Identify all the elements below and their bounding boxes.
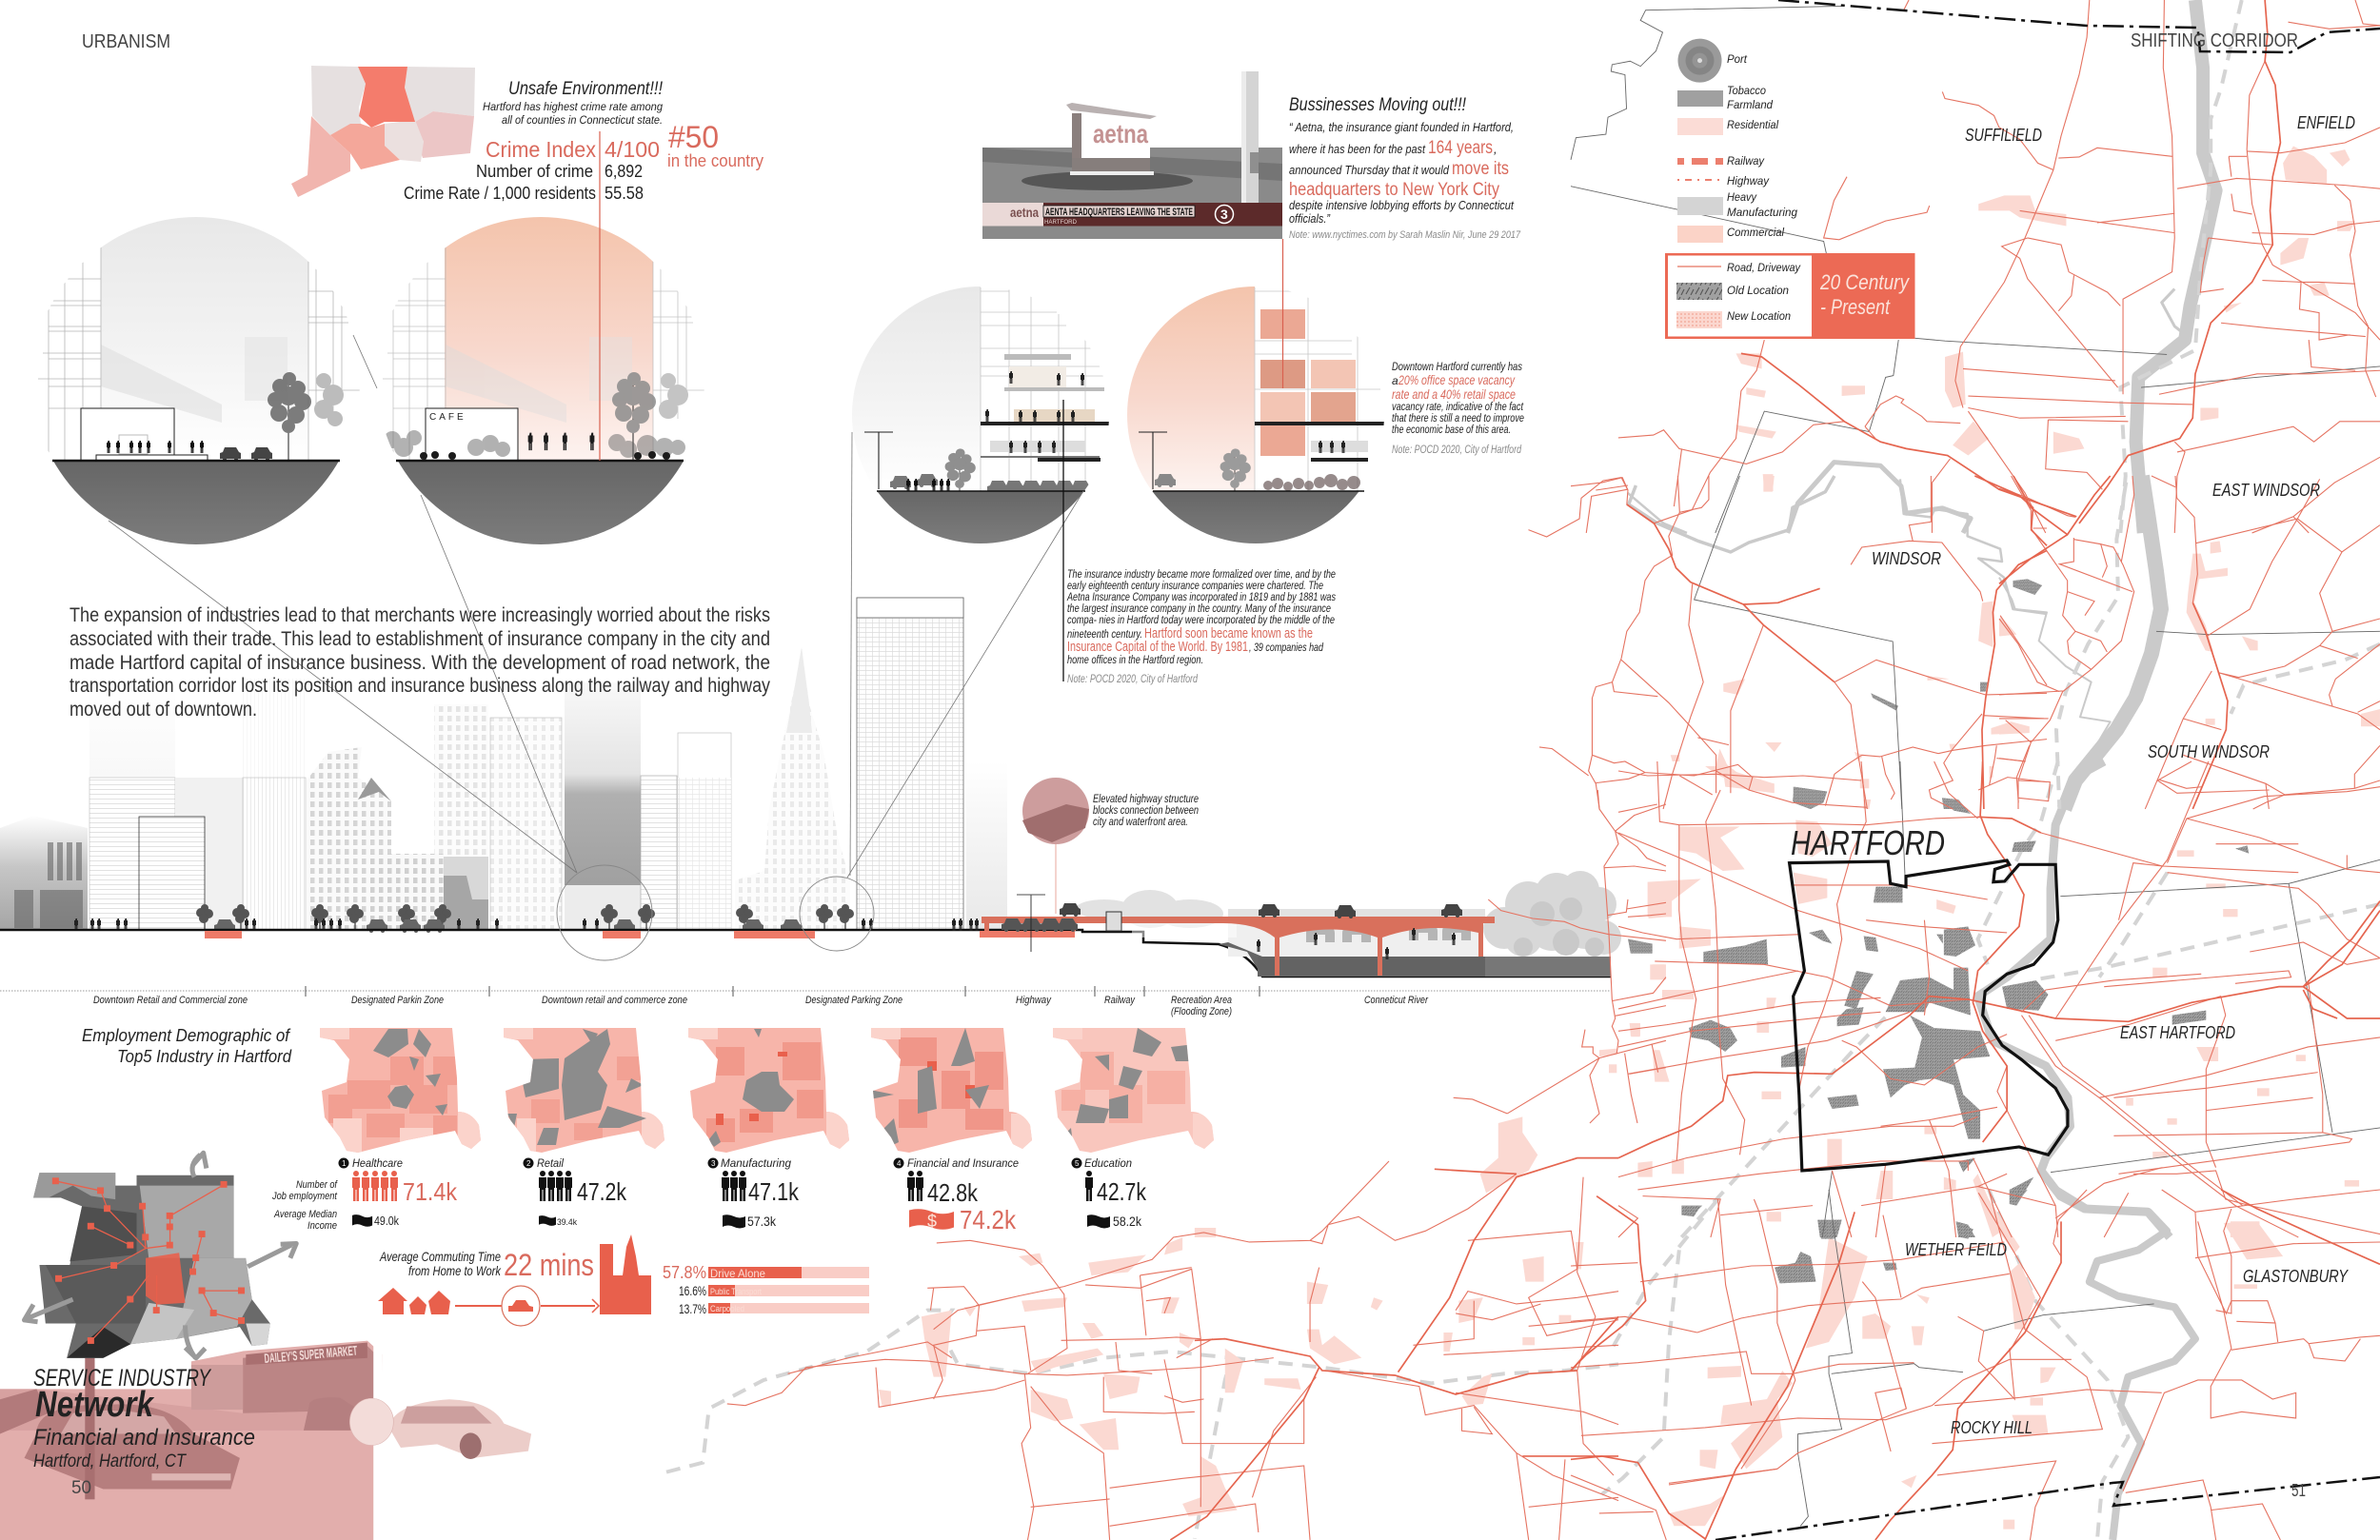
legend: map key: Port (1727, 52, 1748, 66)
photo: Aetna sign, headquarters leaving: 3 (1220, 207, 1228, 222)
legend: map key: Heavy (1727, 190, 1757, 204)
stat: manufacturing: Manufacturing (721, 1156, 791, 1170)
frame: dash-dot study area lines (1716, 0, 2380, 1540)
legend: map key: Residential (1727, 118, 1778, 131)
text block: unsafe environment and crime figures: Crime Rate / 1,000 residents (404, 184, 596, 203)
text block: businesses moving out: Note: www.nyctimes.com by Sarah Maslin Nir, June 29 2017 (1289, 229, 1521, 241)
photo: Aetna sign, headquarters leaving (982, 71, 1282, 239)
text block: insurance history: early eighteenth century insurance companies were chartered. The (1067, 579, 1323, 592)
paragraph: expansion of industries: The expansion of industries lead to that merchants were increasingly worried about the risks (69, 604, 770, 626)
stat: retail (524, 1156, 627, 1227)
axis: corridor zones with labels: (Flooding Zone) (1171, 1006, 1232, 1017)
map: railway dashed lines (666, 0, 2380, 1540)
text block: unsafe environment and crime figures: Hartford has highest crime rate among (483, 100, 663, 113)
bar chart: commute mode share: Carpooled (710, 1304, 744, 1313)
photo: Aetna sign, headquarters leaving: aetna (1010, 205, 1039, 220)
legend: map key: 20 Century (1819, 270, 1911, 294)
paragraph: expansion of industries (69, 604, 770, 721)
text block: insurance history (1066, 567, 1336, 685)
street section: after (pink circle with cafe): CAFE (429, 412, 466, 423)
photo: Aetna sign, headquarters leaving: AENTA HEADQUARTERS LEAVING THE STATE (1045, 207, 1193, 218)
callout: elevated highway oval photo (1022, 778, 1199, 914)
callout: elevated highway oval photo: Elevated highway structure (1093, 794, 1199, 805)
map labels: towns: WETHER FEILD (1905, 1240, 2007, 1259)
bar chart: commute mode share: 13.7% (679, 1301, 706, 1316)
map labels: towns: GLASTONBURY (2243, 1267, 2350, 1286)
commuting: home to work graphic: Average Commuting Time (379, 1249, 501, 1264)
paragraph: expansion of industries: associated with their trade. This lead to establishment of insurance company in the city and (69, 628, 770, 650)
legend: map key (1665, 39, 1915, 339)
text block: businesses moving out (1289, 95, 1521, 241)
stat: healthcare: 71.4k (403, 1177, 458, 1206)
stat: financial and insurance (893, 1156, 1019, 1234)
legend: map key: New Location (1727, 309, 1791, 323)
stat: healthcare (339, 1156, 458, 1228)
text block: businesses moving out: headquarters to New York City (1289, 180, 1499, 200)
title block: service industry network: Financial and Insurance (33, 1425, 255, 1451)
map labels: towns: ENFIELD (2297, 113, 2355, 132)
map labels: towns: WINDSOR (1872, 549, 1941, 568)
stat: manufacturing: 57.3k (747, 1214, 777, 1229)
title block: service industry network: Hartford, Hartford, CT (33, 1451, 187, 1471)
collage: network map over market hall photo (33, 1173, 270, 1358)
bar chart: commute mode share (663, 1263, 869, 1316)
paragraph: expansion of industries: made Hartford capital of insurance business. With the development of road network, the (69, 652, 770, 674)
photo: Aetna sign, headquarters leaving: HARTFORD (1044, 220, 1078, 226)
stat: retail: 47.2k (577, 1177, 627, 1206)
map: retail employment (503, 1028, 669, 1156)
paragraph: expansion of industries: moved out of downtown. (69, 699, 257, 721)
text block: insurance history: compa- nies in Hartford today were incorporated by the middle of the (1067, 613, 1335, 626)
text block: insurance history: Insurance Capital of the World. By 1981 (1067, 639, 1248, 655)
text block: businesses moving out: officials.” (1289, 211, 1331, 226)
map labels: towns: EAST WINDSOR (2212, 481, 2320, 500)
axis: corridor zones with labels: Designated Parkin Zone (351, 995, 444, 1006)
section: elevated highway over Connecticut River (952, 871, 1621, 977)
stat: financial and insurance: 74.2k (960, 1205, 1017, 1234)
black leader line: insurance text (1062, 400, 1064, 681)
heading: employment demographic: Top5 Industry in Hartford (117, 1047, 292, 1066)
legend: map key: Old Location (1727, 284, 1789, 297)
map labels: towns: SOUTH WINDSOR (2148, 742, 2270, 761)
map: rivers (1628, 0, 2216, 1540)
axis: corridor zones with labels: Conneticut River (1364, 995, 1429, 1006)
stat: financial and insurance: Financial and Insurance (907, 1156, 1019, 1170)
axis: corridor zones with labels: Designated Parking Zone (805, 995, 902, 1006)
legend: map key: Manufacturing (1727, 206, 1797, 219)
legend: map key: Commercial (1727, 226, 1784, 239)
text block: insurance history: The insurance industry became more formalized over time, and by the (1067, 567, 1336, 581)
stat: retail: Retail (537, 1156, 564, 1170)
row labels: job employment and income: Average Median (273, 1209, 337, 1220)
text block: unsafe environment and crime figures: all of counties in Connecticut state. (502, 113, 663, 127)
axis: corridor zones with labels (0, 986, 1611, 1017)
stat: financial and insurance: $ (927, 1212, 937, 1231)
row labels: job employment and income (271, 1179, 338, 1232)
bar chart: commute mode share: Drive Alone (710, 1267, 765, 1280)
stat: education: 58.2k (1113, 1214, 1142, 1229)
legend: map key: Farmland (1727, 98, 1773, 111)
text block: office vacancy: Downtown Hartford currently has (1392, 360, 1522, 373)
title block: service industry network (33, 1365, 255, 1471)
bar chart: commute mode share: 57.8% (663, 1263, 706, 1282)
text block: businesses moving out: 164 years (1428, 138, 1493, 158)
text block: unsafe environment and crime figures: Unsafe Environment!!! (508, 79, 664, 99)
axis: corridor zones with labels: Highway (1016, 995, 1052, 1006)
stat: manufacturing: 47.1k (748, 1177, 800, 1206)
axis: corridor zones with labels: Downtown retail and commerce zone (542, 995, 687, 1006)
paragraph: expansion of industries: transportation corridor lost its position and insurance business along the railway and highway (69, 675, 770, 697)
stat: manufacturing: 3 (711, 1159, 716, 1168)
text block: businesses moving out: Bussinesses Moving out!!! (1289, 95, 1467, 115)
stat: financial and insurance: 42.8k (927, 1178, 979, 1207)
map: manufacturing employment (687, 1028, 854, 1156)
text block: businesses moving out: move its (1452, 159, 1509, 179)
map: financial and insurance employment (870, 1028, 1037, 1156)
text block: office vacancy: that there is still a need to improve (1392, 411, 1524, 424)
text block: unsafe environment and crime figures: 4/100 (605, 137, 660, 162)
callout line: red leader from crime panel to circle (599, 131, 601, 461)
page number 50: 50 (71, 1478, 91, 1498)
sign text: Dailey's super market: DAILEY'S SUPER MARKET (264, 1342, 358, 1366)
stat: financial and insurance: 4 (897, 1159, 902, 1168)
legend: map key: Railway (1727, 154, 1765, 168)
heading: employment demographic: Employment Demographic of (82, 1026, 291, 1045)
text block: unsafe environment and crime figures (404, 79, 764, 203)
legend: map key: Highway (1727, 174, 1770, 188)
map: old location patches (1628, 579, 2249, 1283)
title block: service industry network: Network (35, 1385, 155, 1425)
map: grey municipal boundaries (1571, 6, 2380, 1526)
legend: map key: Road, Driveway (1727, 261, 1801, 274)
text block: businesses moving out: where it has been for the past (1289, 142, 1426, 156)
map labels: towns: ROCKY HILL (1951, 1418, 2033, 1437)
map labels: towns: EAST HARTFORD (2120, 1023, 2235, 1042)
axis: corridor zones with labels: Railway (1104, 995, 1136, 1006)
map labels: towns: SUFFILIELD (1965, 126, 2042, 145)
text block: office vacancy: Note: POCD 2020, City of Hartford (1392, 443, 1521, 456)
map labels: towns (1791, 113, 2355, 1437)
text block: unsafe environment and crime figures: 55.58 (605, 184, 644, 203)
text block: office vacancy: 20% office space vacancy (1398, 372, 1516, 387)
stat: retail: 2 (526, 1159, 531, 1168)
stat: healthcare: 1 (342, 1159, 347, 1168)
text block: insurance history: Aetna Insurance Company was incorporated in 1819 and by 1881 was (1066, 590, 1336, 603)
legend: map key: Tobacco (1727, 84, 1766, 97)
text block: office vacancy (1392, 360, 1524, 456)
map: heavy highways (1170, 0, 2380, 1540)
map: road network (727, 0, 2380, 1540)
text block: insurance history: the largest insurance company in the country. Many of the insurance (1067, 602, 1331, 615)
map: Hartford city boundary (1790, 860, 2068, 1171)
page number 51: 51 (2291, 1481, 2306, 1500)
commuting: home to work graphic: 22 mins (504, 1248, 594, 1282)
map: healthcare employment (319, 1028, 486, 1156)
stat: education: 5 (1075, 1159, 1080, 1168)
text block: insurance history: , 39 companies had (1249, 641, 1323, 654)
heading: employment demographic (82, 1026, 292, 1066)
map labels: towns: HARTFORD (1791, 823, 1945, 862)
text block: office vacancy: vacancy rate, indicative of the fact (1392, 400, 1524, 413)
text block: businesses moving out: , (1494, 142, 1497, 156)
photo: Aetna sign, headquarters leaving: aetna (1093, 119, 1148, 148)
office section: before (847, 286, 1123, 548)
bar chart: commute mode share: 16.6% (679, 1283, 706, 1298)
text block: office vacancy: the economic base of this area. (1392, 423, 1511, 436)
text block: businesses moving out: announced Thursday that it would (1289, 163, 1450, 177)
title block: service industry network: SERVICE INDUSTRY (33, 1365, 212, 1392)
text block: unsafe environment and crime figures: 6,892 (605, 162, 643, 181)
stat: education: Education (1084, 1156, 1132, 1170)
stat: education: 42.7k (1097, 1177, 1147, 1206)
text block: office vacancy: a (1392, 374, 1398, 387)
text block: office vacancy: rate and a 40% retail space (1392, 386, 1516, 402)
text block: insurance history: home offices in the Hartford region. (1067, 653, 1203, 666)
arrows: network radiating outward (25, 1153, 296, 1358)
commuting: home to work graphic: from Home to Work (408, 1263, 502, 1278)
leader lines: skyline lenses to section circles (109, 335, 1083, 878)
callout line: red leader from Aetna to vacant office (1281, 239, 1283, 388)
map: new location patches (879, 147, 2380, 1530)
legend: map key: - Present (1820, 295, 1891, 319)
photo: pink vintage street scene (0, 1341, 531, 1540)
stat: manufacturing (708, 1156, 800, 1229)
map: education employment (1052, 1028, 1219, 1156)
stat: retail: 39.4k (557, 1217, 577, 1227)
header: Shifting Corridor: SHIFTING CORRIDOR (2131, 30, 2298, 51)
header: Urbanism: URBANISM (82, 31, 170, 52)
skyline section: downtown buildings (0, 598, 1611, 977)
text block: unsafe environment and crime figures: in the country (667, 151, 764, 170)
street section: before (grey circle) (38, 217, 360, 544)
text block: businesses moving out: despite intensive lobbying efforts by Connecticut (1289, 198, 1515, 212)
stat: healthcare: 49.0k (374, 1214, 399, 1228)
row labels: job employment and income: Number of (296, 1179, 338, 1191)
callout: elevated highway oval photo: city and waterfront area. (1093, 817, 1188, 828)
text block: insurance history: Hartford soon became known as the (1144, 625, 1313, 642)
row labels: job employment and income: Income (307, 1220, 337, 1232)
text block: insurance history: nineteenth century. (1067, 627, 1142, 641)
bar chart: commute mode share: Public Transport (710, 1287, 762, 1296)
text block: businesses moving out: “ Aetna, the insurance giant founded in Hartford, (1289, 120, 1514, 134)
callout: elevated highway oval photo: blocks connection between (1093, 805, 1199, 817)
street section: after (pink circle with cafe) (383, 217, 704, 544)
text block: insurance history: Note: POCD 2020, City of Hartford (1067, 672, 1198, 685)
text block: unsafe environment and crime figures: Number of crime (476, 162, 593, 181)
office section: after, vacant floors (1123, 286, 1399, 548)
choropleth: Connecticut crime rate by county (291, 66, 475, 197)
text block: unsafe environment and crime figures: #50 (668, 120, 719, 154)
commuting: home to work graphic (378, 1234, 651, 1326)
axis: corridor zones with labels: Downtown Retail and Commercial zone (93, 995, 248, 1006)
stat: healthcare: Healthcare (352, 1156, 403, 1170)
text block: unsafe environment and crime figures: Crime Index (486, 137, 596, 162)
row labels: job employment and income: Job employment (271, 1191, 338, 1202)
axis: corridor zones with labels: Recreation Area (1171, 995, 1232, 1006)
stat: education (1072, 1156, 1147, 1229)
